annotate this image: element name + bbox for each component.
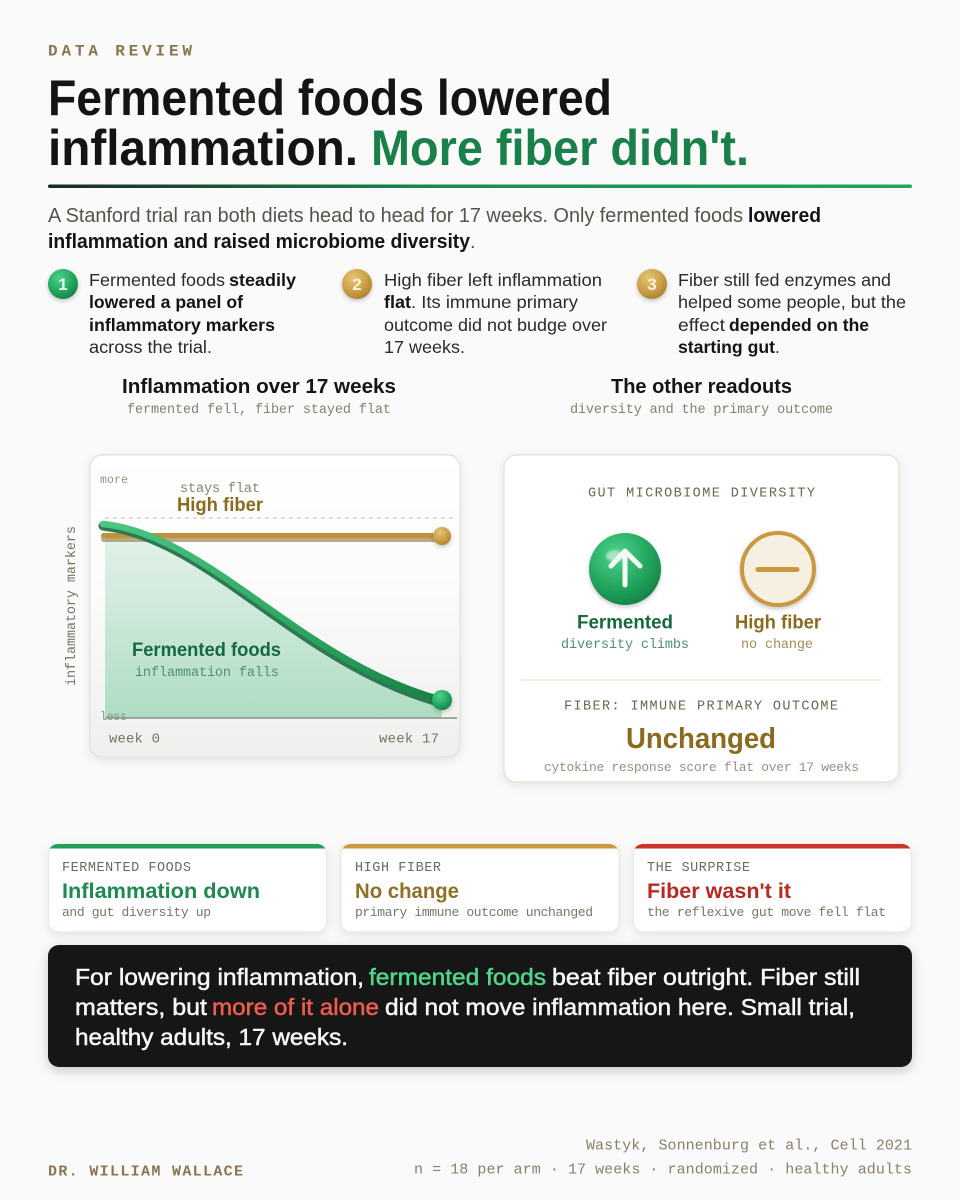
title: inflammation. — [48, 120, 358, 176]
fermented label — [561, 612, 689, 653]
callout: conclusion: matters, but — [75, 994, 208, 1020]
badge 1: 1 — [58, 275, 68, 294]
panel: other readouts: GUT MICROBIOME DIVERSITY — [588, 486, 815, 502]
heading: inflammation over 17 weeks: fermented fell, fiber stayed flat — [127, 403, 391, 418]
takeaway 2: . Its immune primary — [411, 292, 578, 312]
panel: line chart: week 0 — [109, 732, 160, 748]
title: Fermented foods lowered — [48, 70, 612, 126]
fermented label: diversity climbs — [561, 638, 689, 653]
stat card: fermented foods — [48, 844, 327, 932]
stat card: the surprise: Fiber wasn't it — [647, 879, 791, 903]
high fiber label: High fiber — [177, 495, 264, 516]
panel: line chart — [90, 455, 460, 757]
fermented curve — [103, 524, 452, 710]
fermented label: Fermented — [577, 612, 673, 634]
heading: the other readouts — [570, 376, 833, 418]
badge 2 — [342, 269, 372, 299]
icon: up arrow, fermented — [589, 533, 661, 605]
callout: conclusion: fermented foods — [369, 964, 546, 990]
high fiber line — [101, 527, 451, 545]
fermented label: inflammation falls — [135, 666, 279, 681]
stat card: high fiber: HIGH FIBER — [355, 861, 441, 876]
footer: citation: n = 18 per arm · 17 weeks · randomized · healthy adults — [414, 1162, 912, 1178]
eyebrow: data review: DATA REVIEW — [48, 42, 192, 60]
subtitle: inflammation and raised microbiome diversity — [48, 231, 471, 253]
stat card: high fiber — [341, 844, 619, 932]
high fiber label — [735, 612, 822, 653]
footer: citation: Wastyk, Sonnenburg et al., Cell 2021 — [586, 1138, 912, 1154]
high fiber label: no change — [741, 638, 813, 653]
callout: conclusion: more of it alone — [212, 994, 379, 1020]
takeaway 3: . — [775, 337, 780, 357]
takeaway 2: High fiber left inflammation — [384, 270, 602, 290]
takeaway 1 — [48, 269, 296, 357]
high fiber label — [177, 482, 264, 516]
stat card: high fiber: primary immune outcome unchanged — [355, 905, 593, 920]
high fiber label: stays flat — [180, 482, 260, 497]
primary outcome — [544, 700, 859, 775]
title: More fiber didn't. — [371, 120, 749, 176]
panel: line chart: less — [100, 711, 127, 724]
footer: citation — [414, 1138, 912, 1178]
takeaway 2: 17 weeks. — [384, 337, 465, 357]
stat card: the surprise: the reflexive gut move fell flat — [647, 905, 886, 920]
takeaway 2 — [342, 269, 607, 357]
takeaway 1: Fermented foods — [89, 270, 225, 290]
callout: conclusion: did not move inflammation here. Small trial, — [385, 994, 855, 1020]
title rule — [48, 184, 912, 188]
takeaway 3: effect — [678, 315, 725, 335]
panel: line chart: week 17 — [379, 732, 439, 748]
takeaway 2: outcome did not budge over — [384, 315, 607, 335]
fermented label: Fermented foods — [132, 640, 281, 661]
badge 3: 3 — [647, 275, 657, 294]
stat card: fermented foods: FERMENTED FOODS — [62, 861, 191, 876]
takeaway 2: flat — [384, 292, 411, 312]
subtitle: lowered — [748, 205, 821, 227]
takeaway 3: starting gut — [678, 337, 775, 357]
takeaway 3: helped some people, but the — [678, 292, 906, 312]
stat card: high fiber: No change — [355, 879, 459, 903]
badge 2: 2 — [352, 275, 362, 294]
primary outcome: FIBER: IMMUNE PRIMARY OUTCOME — [564, 700, 838, 714]
callout: conclusion — [48, 945, 912, 1067]
takeaway 1: lowered a panel of — [89, 292, 243, 312]
takeaway 3: depended on the — [729, 315, 869, 335]
icon: minus, high fiber — [742, 533, 814, 605]
footer: author: DR. WILLIAM WALLACE — [48, 1164, 243, 1180]
stat card: the surprise — [633, 844, 912, 932]
heading: inflammation over 17 weeks: Inflammation over 17 weeks — [122, 376, 396, 398]
area under fermented curve — [105, 524, 442, 718]
y axis label: inflammatory markers — [65, 526, 80, 686]
primary outcome: cytokine response score flat over 17 weeks — [544, 760, 859, 775]
takeaway 1: inflammatory markers — [89, 315, 275, 335]
callout: conclusion: beat fiber outright. Fiber still — [552, 964, 860, 990]
panel: other readouts — [504, 455, 899, 782]
stat card: the surprise: THE SURPRISE — [647, 861, 750, 876]
heading: the other readouts: The other readouts — [611, 376, 792, 398]
high fiber label: High fiber — [735, 612, 822, 634]
callout: conclusion: For lowering inflammation, — [75, 964, 364, 990]
title — [48, 70, 749, 176]
takeaway 3 — [637, 269, 906, 357]
heading: the other readouts: diversity and the primary outcome — [570, 403, 833, 418]
stat card: fermented foods: and gut diversity up — [62, 905, 211, 920]
subtitle: A Stanford trial ran both diets head to head for 17 weeks. Only fermented foods — [48, 205, 743, 227]
badge 1 — [48, 269, 78, 299]
heading: inflammation over 17 weeks — [122, 376, 396, 418]
panel: line chart: more — [100, 474, 128, 487]
takeaway 1: across the trial. — [89, 337, 212, 357]
takeaway 1: steadily — [229, 270, 296, 290]
takeaway 3: Fiber still fed enzymes and — [678, 270, 891, 290]
primary outcome: Unchanged — [626, 723, 776, 755]
badge 3 — [637, 269, 667, 299]
stat card: fermented foods: Inflammation down — [62, 879, 260, 903]
subtitle — [48, 205, 821, 253]
fermented label — [132, 640, 281, 681]
callout: conclusion: healthy adults, 17 weeks. — [75, 1024, 348, 1050]
subtitle: . — [470, 231, 476, 253]
